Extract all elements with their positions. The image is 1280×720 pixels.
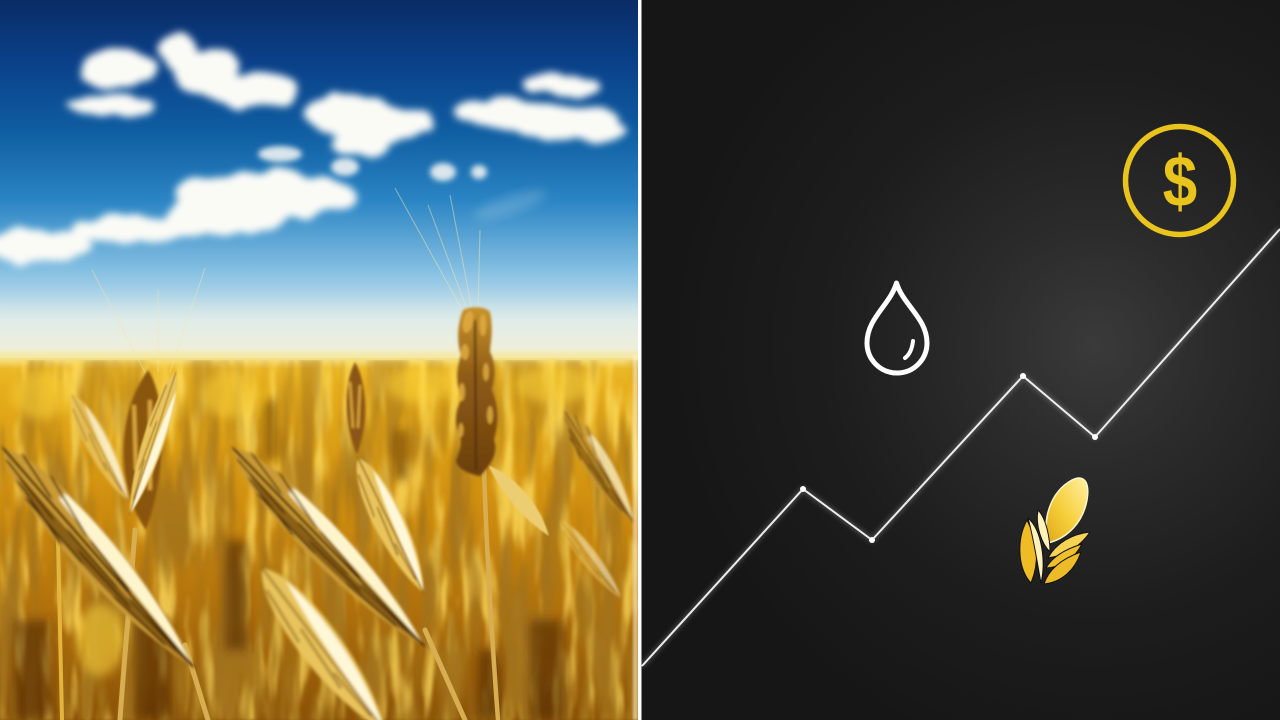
wheat ear: right edge faint <box>563 410 635 524</box>
soft horizon edge <box>0 352 660 364</box>
wheat ear: left faint <box>70 394 130 500</box>
wheat ear: centre diagonal <box>230 446 426 648</box>
icon: water drop <box>867 283 927 373</box>
wheat ear: right faint lower <box>560 521 622 598</box>
sky background <box>0 0 640 365</box>
blurred background wheat <box>12 367 595 720</box>
panel: dark chart background <box>640 0 1280 720</box>
dark wheat streaks <box>0 360 640 720</box>
wheat ear: large left <box>0 446 196 670</box>
data points <box>800 373 1098 543</box>
wheat ear: upper left dark <box>124 370 162 530</box>
line chart: rising trend <box>642 229 1280 666</box>
field background <box>0 358 640 720</box>
photo edge highlight <box>633 355 638 720</box>
wheat ear: upper left pale side <box>128 370 178 516</box>
icon: dollar coin: $ <box>1163 142 1197 222</box>
wheat ear: tall centre <box>456 307 498 476</box>
clouds <box>0 36 626 263</box>
panel: wheat field photo <box>0 0 660 720</box>
wheat stems <box>58 470 498 720</box>
light wheat streaks <box>0 360 640 720</box>
divider <box>638 0 642 720</box>
wheat ear: centre upright <box>355 458 425 592</box>
wheat ear: lower centre <box>260 567 384 720</box>
wheat ear: small distant <box>347 362 365 455</box>
icon: corn <box>1020 478 1090 584</box>
awns rising into the sky <box>92 188 480 378</box>
icon: dollar coin <box>1126 126 1234 234</box>
leaf by tall ear <box>488 465 549 536</box>
horizon haze <box>0 302 638 334</box>
